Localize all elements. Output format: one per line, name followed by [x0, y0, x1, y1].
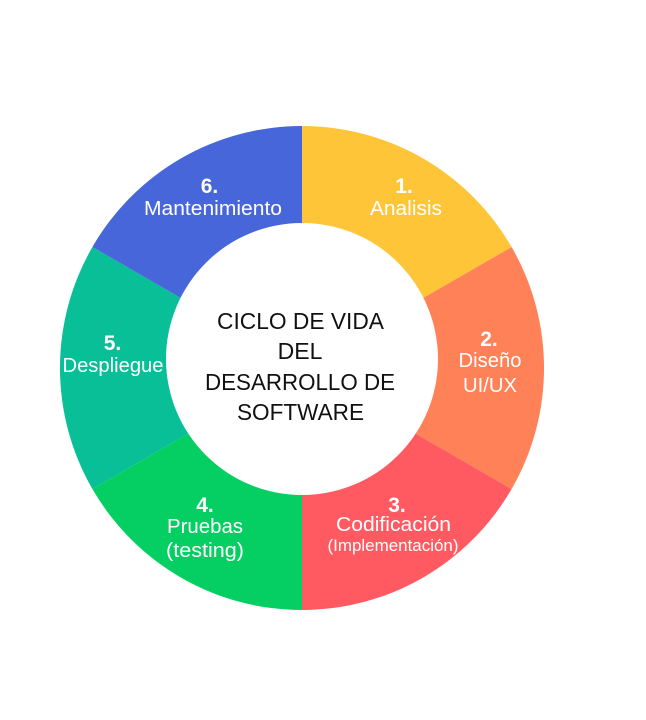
label: 3. Codificación (Implementación): (Implementación) [328, 536, 458, 555]
center title: DEL [278, 338, 323, 364]
label: 1. Analisis: 1. [395, 175, 413, 198]
label: 2. Diseño UI/UX [458, 328, 522, 397]
label: 6. Mantenimiento: Mantenimiento [144, 198, 282, 220]
label: 3. Codificación (Implementación): Codificación [336, 514, 451, 536]
label: 1. Analisis [370, 175, 442, 220]
label: 4. Pruebas (testing): (testing) [166, 540, 244, 562]
label: 5. Despliegue: Despliegue [62, 355, 164, 377]
segment 2: Diseño UI/UX [302, 247, 544, 489]
label: 3. Codificación (Implementación): 3. [388, 494, 406, 517]
label: 2. Diseño UI/UX: UI/UX [463, 375, 517, 397]
label: 4. Pruebas (testing) [166, 494, 244, 562]
center title [205, 308, 395, 425]
center title: SOFTWARE [237, 399, 364, 425]
segment 1: Analisis [302, 126, 512, 368]
center title: CICLO DE VIDA [217, 308, 385, 334]
label: 3. Codificación (Implementación) [328, 494, 458, 555]
label: 4. Pruebas (testing): Pruebas [167, 516, 243, 538]
segment 3: Codificación [302, 368, 512, 610]
label: 5. Despliegue: 5. [104, 332, 121, 355]
label: 2. Diseño UI/UX: 2. [480, 328, 498, 351]
label: 1. Analisis: Analisis [370, 198, 442, 220]
segment 6: Mantenimiento [92, 126, 302, 368]
label: 5. Despliegue [62, 332, 164, 377]
label: 6. Mantenimiento: 6. [201, 175, 218, 198]
label: 4. Pruebas (testing): 4. [196, 494, 214, 517]
center hole [166, 223, 438, 495]
label: 6. Mantenimiento [144, 175, 282, 220]
segment 5: Despliegue [60, 247, 302, 489]
center title: DESARROLLO DE [205, 369, 395, 395]
segment 4: Pruebas [92, 368, 302, 610]
label: 2. Diseño UI/UX: Diseño [458, 350, 522, 372]
